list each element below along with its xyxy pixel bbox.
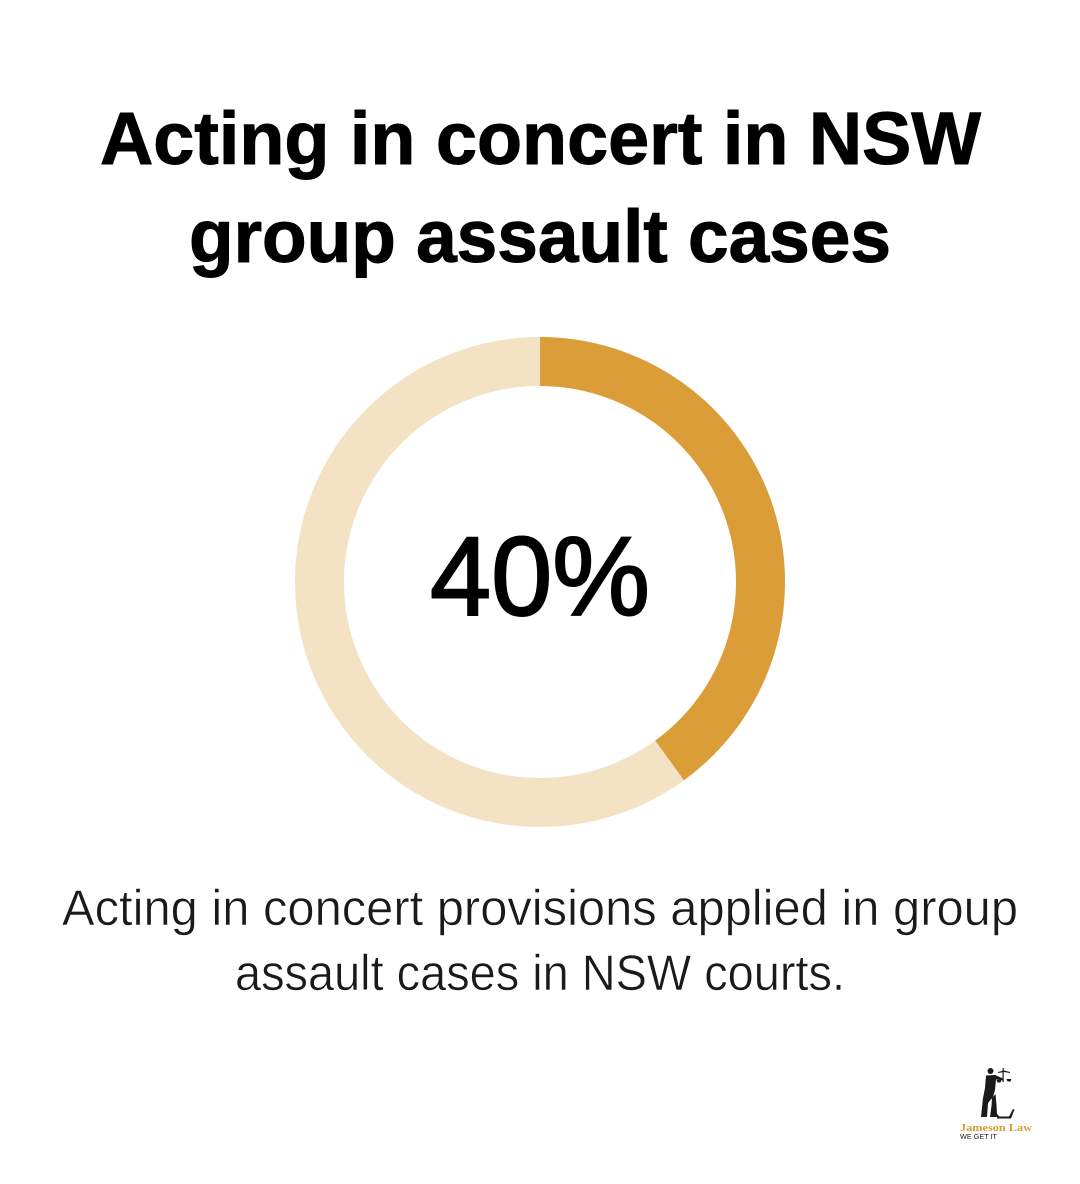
description text: assault cases in NSW courts. xyxy=(235,945,845,1001)
logo: Jameson Law xyxy=(960,1068,1032,1141)
logo name: Jameson Law xyxy=(960,1123,1032,1134)
title xyxy=(100,97,981,278)
donut track xyxy=(320,362,760,802)
donut chart: 40% xyxy=(320,362,761,802)
logo tagline: WE GET IT xyxy=(960,1134,998,1141)
icon: lady justice xyxy=(981,1068,1014,1118)
description text xyxy=(62,880,1018,1001)
title: Acting in concert in NSW xyxy=(100,97,981,180)
donut value arc xyxy=(540,362,761,760)
description text: Acting in concert provisions applied in group xyxy=(62,880,1018,936)
center value: 40% xyxy=(430,514,650,639)
title: group assault cases xyxy=(189,195,891,278)
